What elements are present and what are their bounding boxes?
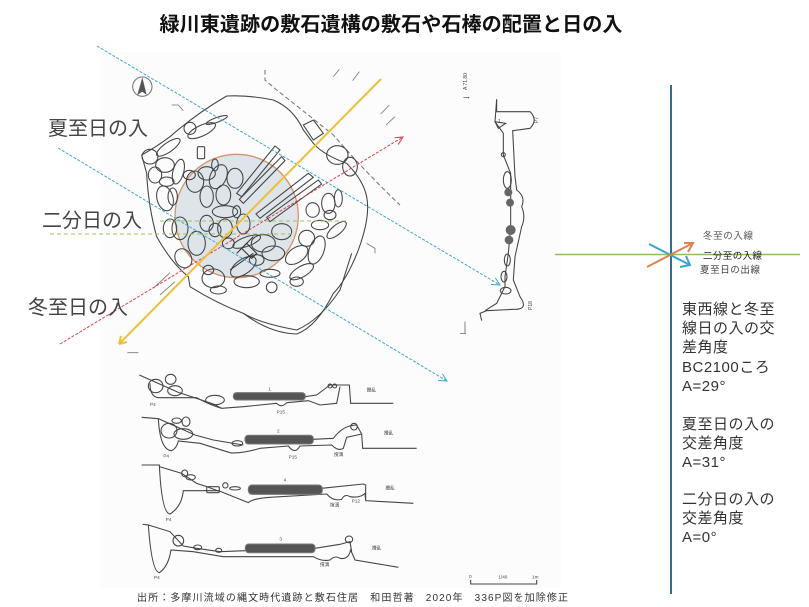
section labels: P15 bbox=[289, 455, 297, 460]
chart: plan view of stone-paved pit bbox=[127, 69, 400, 353]
label: equinox sunset: 二分日の入 bbox=[42, 209, 142, 232]
section labels: 1m bbox=[532, 575, 539, 580]
label: equinox line: 二分至の入線 bbox=[703, 250, 762, 262]
line: equinox sunset (green dashed) bbox=[50, 221, 349, 234]
text block: winter solstice angle bbox=[682, 301, 775, 395]
label: winter solstice sunset: 冬至日の入 bbox=[28, 296, 128, 319]
section labels: 4 bbox=[284, 478, 287, 483]
text block: equinox angle: 交差角度 bbox=[682, 510, 744, 527]
paving stones bbox=[142, 114, 357, 294]
text block: equinox angle: A=0° bbox=[682, 529, 717, 546]
section labels bbox=[150, 387, 539, 580]
chart: four longitudinal section drawings bbox=[139, 374, 539, 584]
scale bar bbox=[471, 580, 537, 584]
section labels: P15 bbox=[277, 409, 285, 414]
text block: summer solstice angle: 夏至日の入の bbox=[682, 416, 775, 433]
pit outline bbox=[142, 96, 368, 334]
text block: winter solstice angle: 差角度 bbox=[682, 339, 729, 356]
title: 緑川東遺跡の敷石遺構の敷石や石棒の配置と日の入 bbox=[160, 12, 622, 36]
label: summer solstice sunset: 夏至日の入 bbox=[48, 118, 148, 140]
east section labels: P18 bbox=[528, 301, 534, 310]
arrow: summer solstice line bbox=[649, 244, 690, 267]
section labels: P4 bbox=[163, 454, 169, 459]
highlighted circle over central hearth area bbox=[175, 154, 298, 278]
section labels: P12 bbox=[352, 499, 360, 504]
text block: summer solstice angle: A=31° bbox=[682, 454, 726, 471]
line: site axis (yellow arrow) bbox=[119, 79, 381, 344]
section labels: P4 bbox=[166, 517, 172, 522]
east section labels: P7 bbox=[534, 117, 540, 123]
text block: summer solstice angle bbox=[682, 416, 775, 471]
section labels: 0 bbox=[469, 574, 472, 579]
text block: winter solstice angle: 東西線と冬至 bbox=[682, 301, 775, 318]
text block: summer solstice angle: 交差角度 bbox=[682, 435, 744, 452]
text block: equinox angle bbox=[682, 491, 775, 546]
section 2 bbox=[142, 417, 417, 453]
section labels: 1/40 bbox=[498, 574, 508, 579]
section labels: 撹溝 bbox=[330, 502, 340, 509]
arrow: winter solstice line bbox=[647, 243, 693, 267]
section labels: P4 bbox=[154, 575, 160, 580]
section 3 bbox=[142, 465, 413, 514]
text block: winter solstice angle: 線日の入の交 bbox=[682, 320, 775, 337]
text block: winter solstice angle: A=29° bbox=[682, 378, 726, 395]
label: winter solstice line: 冬至の入線 bbox=[703, 230, 753, 242]
stone rods bbox=[237, 146, 280, 197]
source note: 出所：多摩川流域の縄文時代遺跡と敷石住居 和田哲著 2020年 336P図を加除修正 bbox=[137, 591, 568, 604]
section 4 bbox=[143, 524, 398, 573]
line: summer solstice sunset (blue dashed arrows) bbox=[58, 46, 500, 381]
north-south line bbox=[670, 85, 672, 594]
east section labels bbox=[463, 73, 540, 310]
panel: scanned site drawing background bbox=[100, 52, 561, 588]
section markers bbox=[127, 69, 395, 353]
chart: east section drawing bbox=[460, 97, 534, 333]
diagram: azimuth crossing lines bbox=[555, 85, 800, 594]
section labels: P4 bbox=[150, 402, 156, 407]
section labels: 攪乱 bbox=[372, 545, 382, 552]
section labels: 1 bbox=[268, 387, 271, 392]
section labels: 攪乱 bbox=[385, 485, 395, 492]
east section labels: A 71.80 bbox=[463, 73, 469, 90]
stone rod cross-sections bbox=[504, 188, 516, 244]
text block: winter solstice angle: BC2100ころ bbox=[682, 359, 770, 376]
section labels: 攪乱 bbox=[384, 430, 394, 437]
section labels: 3 bbox=[279, 536, 282, 541]
section labels: 撹溝 bbox=[334, 451, 344, 458]
section labels: 撹溝 bbox=[320, 561, 330, 568]
east section labels: 1 bbox=[498, 119, 501, 125]
section labels: 攪乱 bbox=[367, 387, 376, 394]
label: summer solstice sunrise line: 夏至日の出線 bbox=[700, 264, 760, 276]
east-west line bbox=[555, 254, 800, 256]
north arrow bbox=[133, 77, 152, 96]
section labels: 2 bbox=[277, 429, 280, 434]
section 1 bbox=[139, 374, 393, 408]
text block: equinox angle: 二分日の入の bbox=[682, 491, 775, 508]
line: winter solstice sunset (red dashed arrow) bbox=[60, 137, 403, 344]
